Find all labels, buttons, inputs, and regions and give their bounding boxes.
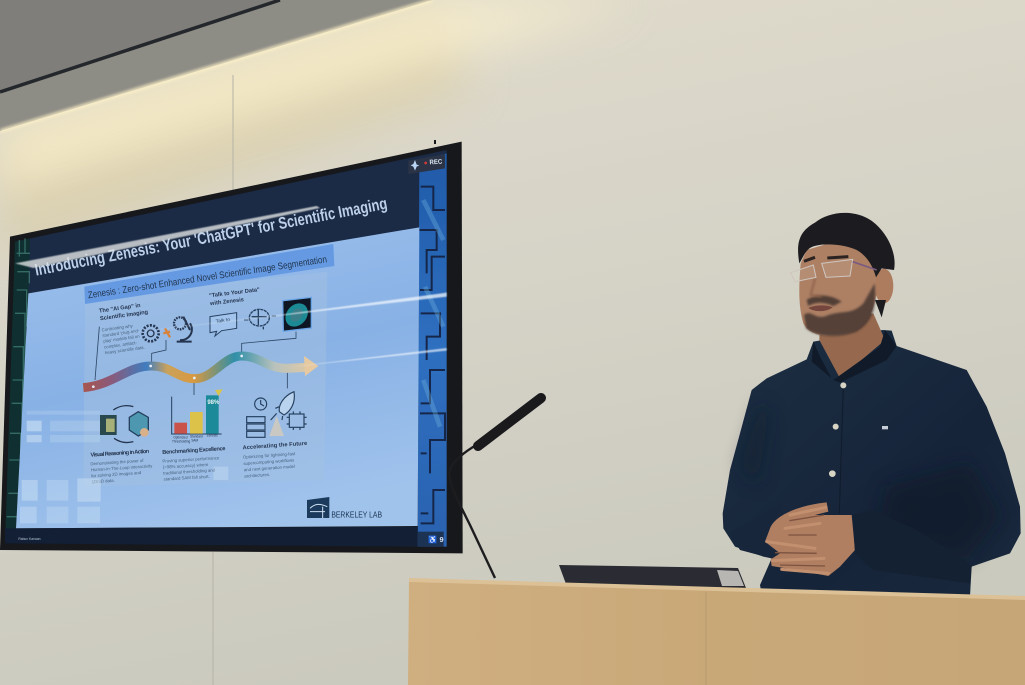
visual reasoning text: Visual Reasoning in Action (90, 449, 150, 459)
AI gap text: The "AI Gap" in (99, 303, 141, 315)
AI gap text (99, 302, 154, 355)
glasses (791, 259, 877, 282)
bottom bar: Rabun Kanaan (18, 537, 41, 541)
nose shadow (811, 278, 822, 297)
accelerating text: Optimizing for lightning-fast (243, 451, 296, 460)
ceiling (0, 0, 432, 131)
bar chart: Optimized (173, 435, 188, 439)
presenter (723, 213, 1021, 597)
segmented image thumbnail (281, 297, 312, 331)
icon: talk bubble (210, 313, 237, 336)
monitor (0, 140, 463, 553)
bar chart: 98% (207, 400, 220, 406)
mouth (808, 305, 833, 311)
accelerating text: supercomputing workflows (243, 457, 294, 466)
benchmarking text: Proving superior performance (162, 455, 220, 464)
slide title: Introducing Zenesis: Your 'ChatGPT' for Scientific Imaging (33, 194, 389, 280)
window reflections (20, 411, 228, 523)
AI gap text: standard 'plug-and- (102, 328, 140, 338)
bar chart: Thresholding (172, 439, 190, 443)
talk to your data heading: with Zenesis (209, 297, 244, 307)
connector lines (95, 327, 296, 395)
visual reasoning text: 1D/3D data. (92, 478, 115, 484)
REC badge (408, 154, 445, 174)
moustache (807, 295, 842, 306)
hands (765, 502, 855, 576)
icon: rocket, server, clock and chip (247, 392, 307, 437)
AI gap text: Scientific Imaging (100, 309, 149, 322)
laptop (559, 565, 746, 588)
accelerating text: Accelerating the Future (242, 441, 307, 451)
monitor bezel (0, 142, 463, 553)
right cuff (853, 510, 972, 583)
neck (819, 313, 885, 378)
left circuit panel (5, 238, 30, 543)
benchmarking text: (>98% accuracy) where (163, 462, 209, 470)
icon: brain (244, 309, 276, 329)
benchmarking text: Benchmarking Excellence (162, 446, 226, 456)
accessibility badge: ♿ 9 (428, 535, 444, 544)
visual reasoning text: Demonstrating the power of (90, 458, 144, 466)
collar (812, 330, 897, 383)
icon: gears and microscope (143, 317, 192, 342)
shirt placket and buttons (829, 382, 888, 513)
Berkeley Lab logo (307, 497, 382, 520)
visual reasoning text: Human-in-The-Loop interactivity (91, 463, 153, 472)
visual reasoning text: for solving 2D images and (91, 470, 142, 478)
light glare streaks (90, 293, 447, 367)
accessibility badge (418, 532, 444, 547)
bar chart: Standard (190, 435, 203, 439)
beard (804, 283, 875, 336)
content card (83, 272, 327, 487)
bottom bar (5, 527, 418, 547)
talk to your data heading (208, 287, 261, 307)
subtitle bar: Zenesis : Zero-shot Enhanced Novel Scientific Image Segmentation (87, 254, 328, 301)
benchmarking text: traditional thresholding and (163, 467, 216, 476)
slide content (20, 194, 389, 523)
right circuit panel (418, 153, 447, 547)
bar chart (172, 389, 223, 443)
REC badge: REC (429, 159, 443, 166)
accelerating text: architectures. (244, 472, 270, 479)
slide background (16, 227, 419, 528)
icon: talk bubble: Talk to (215, 317, 231, 325)
AI gap text: play' models fail on (103, 334, 141, 344)
shirt (723, 330, 1021, 597)
hair (798, 213, 895, 277)
microphone (449, 398, 541, 578)
benchmarking text: standard SAM fall short. (163, 474, 210, 482)
accelerating text: and next generation model (244, 464, 295, 472)
left cuff sleeve fold (730, 503, 783, 557)
face (799, 240, 877, 336)
roadmap ribbon arrow (83, 355, 318, 388)
ear (875, 269, 893, 303)
bar chart: Zenesis (207, 434, 218, 438)
screen header (15, 150, 447, 293)
Berkeley Lab logo: BERKELEY LAB (331, 511, 382, 520)
fingers (767, 507, 828, 573)
icon: human in the loop cube (100, 406, 149, 442)
podium (408, 578, 1025, 685)
eyebrows (804, 257, 848, 261)
glare on header (15, 206, 320, 268)
shirt shading (740, 403, 1000, 560)
visual reasoning text (90, 449, 154, 484)
bar chart: SAM (191, 438, 199, 442)
AI gap text: Confronting why (101, 323, 134, 332)
benchmarking text (162, 446, 227, 482)
AI gap text: heavy scientific data. (105, 345, 145, 355)
talk to your data heading: "Talk to Your Data" (209, 287, 260, 299)
AI gap text: complex, artifact- (104, 340, 138, 350)
accelerating text (242, 441, 309, 479)
